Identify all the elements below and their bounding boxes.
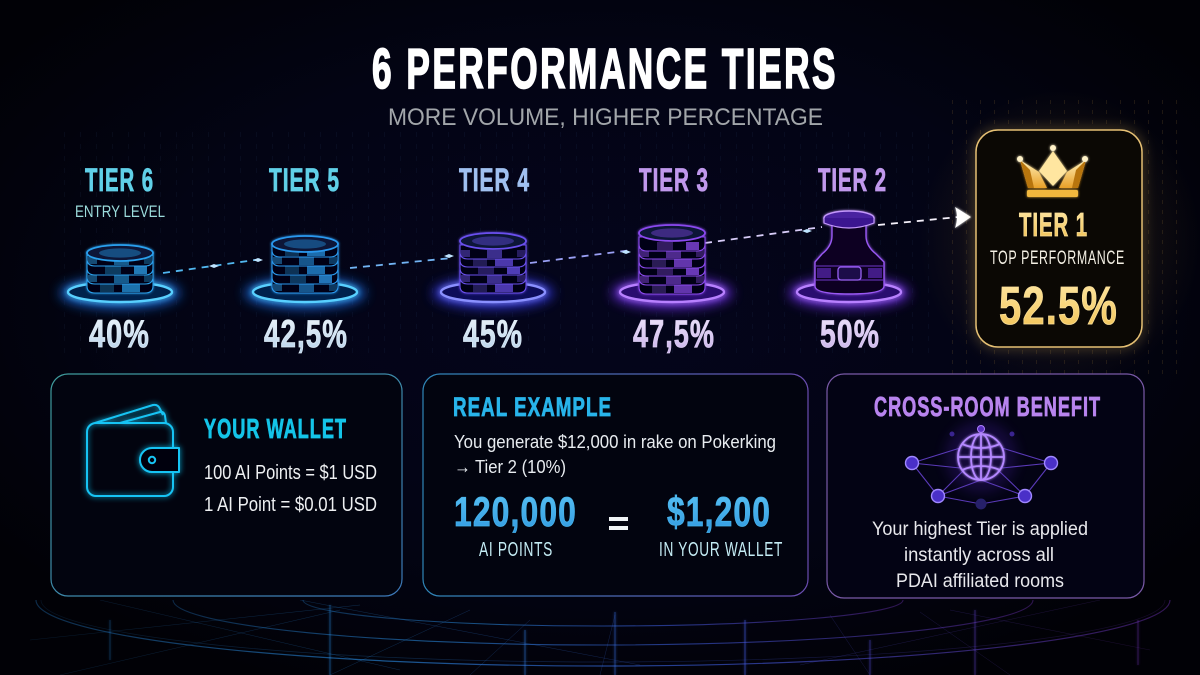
title: 6 PERFORMANCE TIERS (372, 37, 838, 101)
tier 1 card: TIER 1 (1019, 206, 1088, 243)
floor grid (30, 600, 1171, 675)
panel: cross-room benefit: Your highest Tier is applied (872, 519, 1088, 540)
panel: your wallet: 100 AI Points = $1 USD (204, 462, 377, 484)
panel: real example: AI POINTS (479, 539, 553, 561)
tier 5: TIER 5 (269, 162, 340, 198)
tier 4: 45% (463, 313, 523, 356)
panel: real example: → Tier 2 (10%) (454, 456, 566, 477)
tier 1 card: 52.5% (999, 276, 1118, 336)
chip stack tier 5 (245, 236, 365, 308)
tier 1 card: TOP PERFORMANCE (990, 248, 1125, 269)
panel: real example: REAL EXAMPLE (453, 392, 612, 422)
tier 6: ENTRY LEVEL (75, 202, 165, 221)
tier 6 (60, 162, 180, 356)
panel: cross-room benefit: PDAI affiliated rooms (896, 571, 1064, 592)
tier 4 (433, 162, 553, 356)
tier 1 card (976, 130, 1142, 347)
progress arrow (163, 207, 971, 273)
panel: real example: 120,000 (454, 488, 577, 535)
tier 5 (245, 162, 365, 356)
tier 6: TIER 6 (85, 162, 154, 198)
icon: crown (1017, 145, 1088, 197)
tier 3: TIER 3 (639, 162, 709, 198)
tier 3 (612, 162, 732, 356)
panel: real example (423, 374, 808, 596)
chip stack tier 3 (612, 225, 732, 308)
panel: your wallet (51, 374, 402, 596)
panel: real example: $1,200 (667, 488, 771, 535)
panel: your wallet: 1 AI Point = $0.01 USD (204, 494, 377, 516)
chip stack tier 4 (433, 233, 553, 308)
tier 2: 50% (820, 313, 880, 356)
subtitle: MORE VOLUME, HIGHER PERCENTAGE (388, 104, 823, 131)
icon: wallet (87, 405, 179, 496)
tier 3: 47,5% (633, 313, 715, 356)
tier 2 (789, 162, 909, 356)
panel: real example: IN YOUR WALLET (659, 539, 783, 561)
panel: cross-room benefit: instantly across all (904, 545, 1054, 566)
tier 2: TIER 2 (818, 162, 887, 198)
panel: cross-room benefit (827, 374, 1144, 598)
panel: your wallet: YOUR WALLET (204, 413, 347, 444)
tier 6: 40% (89, 313, 150, 356)
chip stack tier 6 (60, 245, 180, 308)
morphed chip stack tier 2 (789, 211, 909, 308)
equals sign (609, 517, 628, 530)
panel: real example: You generate $12,000 in rake on Pokerking (454, 431, 776, 452)
icon: network globe (906, 421, 1058, 510)
tier 5: 42,5% (264, 313, 348, 356)
tier 4: TIER 4 (459, 162, 530, 198)
